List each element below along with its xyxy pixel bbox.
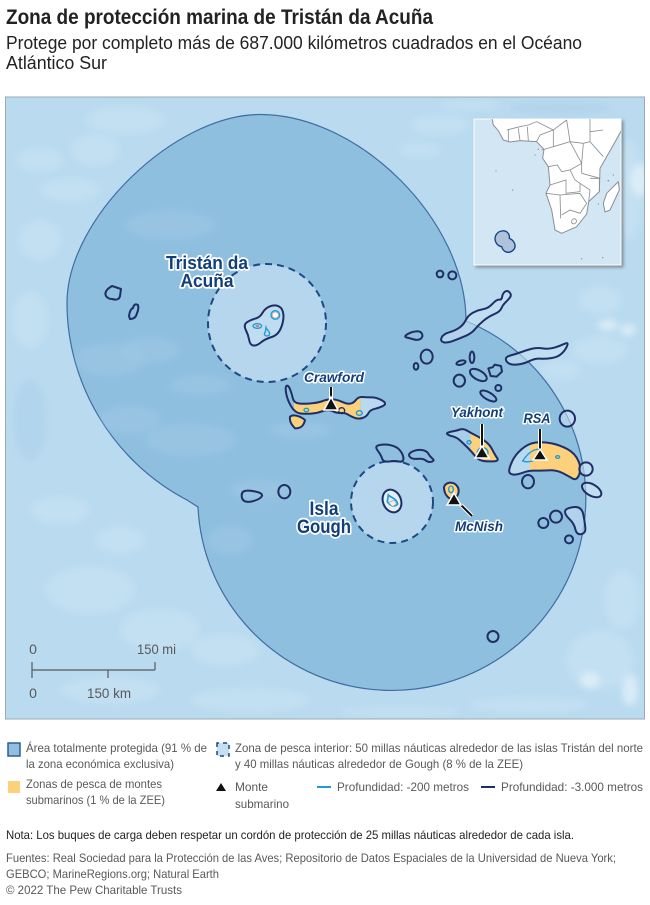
seamount marker: RSA: RSA — [524, 410, 550, 426]
scale bar: 150 km — [87, 685, 131, 701]
scale bar — [30, 644, 176, 698]
seamounts: around Gough — [242, 445, 434, 515]
seamount marker: Yakhont: Yakhont — [451, 404, 504, 420]
seamount marker: McNish: McNish — [455, 518, 503, 534]
seamount marker: RSA — [524, 410, 550, 460]
inner fishing zone: Gough — [351, 461, 433, 543]
label: Tristán da Acuña — [166, 253, 249, 291]
label: Isla Gough — [297, 499, 351, 538]
legend: fully protected area: Área totalmente protegida (91 % de — [26, 740, 207, 755]
seamounts: central and southeast — [444, 429, 604, 543]
Yakhont seamount zone — [447, 429, 498, 461]
sources: GEBCO; MarineRegions.org; Natural Earth — [6, 867, 219, 881]
legend: fully protected area — [8, 740, 207, 771]
legend: inner fishing zone — [217, 741, 643, 771]
sources: Fuentes: Real Sociedad para la Protección de las Aves; Repositorio de Datos Espaciales de la Universidad de Nueva York; — [6, 851, 616, 865]
legend: seamount: submarino — [235, 797, 289, 811]
scale bar: 0 — [29, 685, 37, 701]
subtitle — [6, 33, 582, 73]
seamount marker: Crawford: Crawford — [304, 369, 364, 385]
seamounts: northeast cluster — [405, 271, 575, 427]
southeast seamount contours — [522, 462, 604, 543]
legend: depth -200: Profundidad: -200 metros — [337, 780, 469, 794]
scale bar: 0 — [29, 641, 37, 657]
legend: seamount fishing zones — [8, 777, 165, 807]
scale bar: 150 mi — [137, 641, 176, 657]
note: Nota: Los buques de carga deben respetar un cordón de protección de 25 millas náuticas alrededor de cada isla. — [6, 828, 574, 842]
label: Tristán da Acuña: Acuña — [180, 271, 234, 291]
seamount marker: McNish — [447, 493, 503, 534]
legend: seamount — [216, 780, 289, 811]
protected area (EEZ) — [67, 114, 586, 690]
map panel — [5, 97, 650, 719]
sources — [6, 851, 616, 897]
McNish seamount zone — [444, 483, 459, 499]
subtitle: Protege por completo más de 687.000 kilómetros cuadrados en el Océano — [6, 33, 582, 53]
legend: fully protected area: la zona económica exclusiva) — [26, 757, 174, 771]
inner fishing zone: Tristan — [208, 264, 326, 382]
legend: depth -3000: Profundidad: -3.000 metros — [501, 780, 643, 794]
legend: inner fishing zone: Zona de pesca interior: 50 millas náuticas alrededor de las islas Tristán del norte — [235, 741, 643, 755]
seamount marker: Yakhont — [451, 404, 504, 458]
seamounts: Tristan and Crawford — [245, 305, 387, 428]
mini protected area — [495, 231, 515, 252]
Madagascar — [603, 182, 619, 212]
small islands — [495, 149, 614, 259]
label: Tristán da Acuña: Tristán da — [166, 253, 249, 273]
RSA seamount zone — [509, 442, 580, 479]
legend: seamount fishing zones: submarinos (1 % de la ZEE) — [26, 793, 165, 807]
label: Isla Gough: Gough — [297, 517, 351, 538]
Crawford seamount zone — [286, 386, 387, 428]
legend: inner fishing zone: y 40 millas náuticas alrededor de Gough (8 % de la ZEE) — [235, 757, 523, 771]
title: Zona de protección marina de Tristán da Acuña — [6, 6, 433, 29]
legend — [8, 740, 643, 811]
label: Isla Gough: Isla — [310, 499, 339, 520]
Africa — [492, 117, 622, 233]
Gough island contours — [382, 488, 402, 514]
sources: © 2022 The Pew Charitable Trusts — [6, 883, 182, 897]
inset locator map — [474, 117, 622, 265]
subtitle: Atlántico Sur — [6, 53, 107, 73]
western seamount contours — [105, 286, 498, 642]
legend: seamount: Monte — [235, 780, 268, 794]
seamount marker: Crawford — [304, 369, 364, 410]
map frame — [6, 97, 644, 719]
southern seamount ring — [488, 631, 498, 642]
legend: seamount fishing zones: Zonas de pesca de montes — [26, 777, 162, 791]
island contours: Tristan da Acuña — [245, 305, 283, 346]
